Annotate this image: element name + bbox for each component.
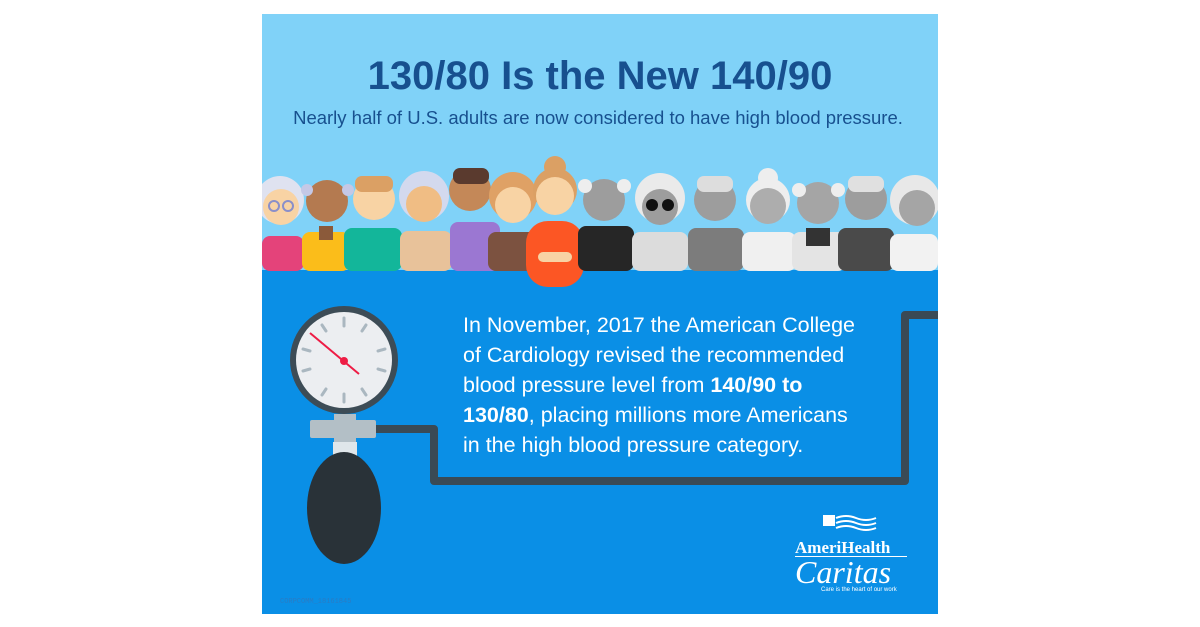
- infographic card: [262, 14, 938, 614]
- people illustration: [256, 156, 940, 287]
- tube: [375, 315, 938, 481]
- title: 130/80 Is the New 140/90: [368, 54, 832, 98]
- logo: Caritas: [795, 554, 891, 590]
- gauge: [290, 306, 398, 414]
- body text: of Cardiology revised the recommended: [463, 343, 844, 367]
- logo: Care is the heart of our work: [821, 587, 898, 593]
- body text: In November, 2017 the American College: [463, 313, 855, 337]
- logo: AmeriHealth: [795, 538, 891, 557]
- body text: 130/80, placing millions more Americans: [463, 403, 848, 427]
- logo: [795, 515, 907, 593]
- subtitle: Nearly half of U.S. adults are now considered to have high blood pressure.: [293, 107, 903, 128]
- valve and bulb: [307, 414, 381, 564]
- body text: blood pressure level from 140/90 to: [463, 373, 802, 397]
- code: CORPCOMM_18161845: [280, 598, 351, 606]
- body text: in the high blood pressure category.: [463, 433, 803, 457]
